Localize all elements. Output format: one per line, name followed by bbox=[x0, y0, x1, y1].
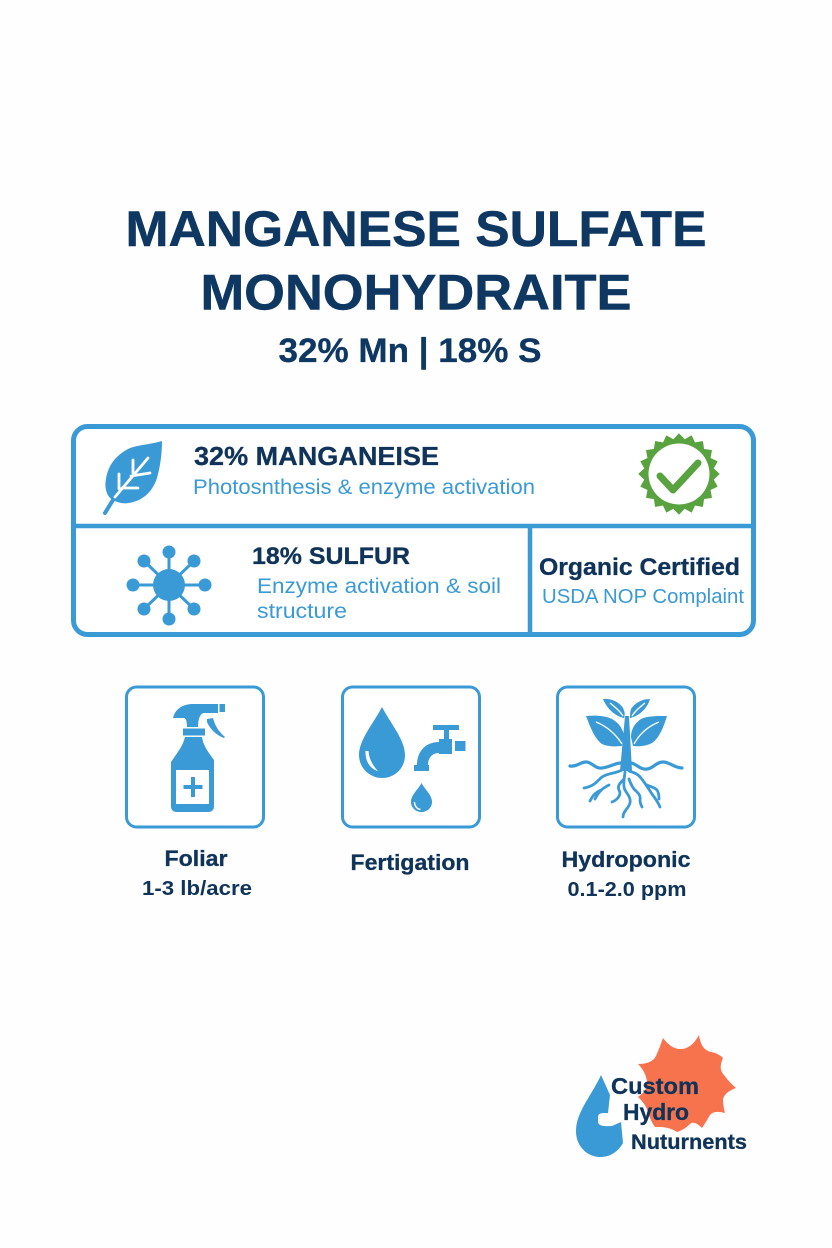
title: MANGANESE SULFATE bbox=[126, 201, 706, 257]
icon: green certified badge bbox=[639, 434, 719, 514]
label: hydroponic: Hydroponic bbox=[562, 847, 690, 872]
text: sulfur: 18% SULFUR bbox=[252, 543, 410, 570]
label: foliar bbox=[142, 846, 252, 900]
label: foliar: Foliar bbox=[164, 846, 228, 871]
label: foliar: 1-3 lb/acre bbox=[142, 878, 252, 900]
label: hydroponic: 0.1-2.0 ppm bbox=[568, 879, 686, 901]
logo: Custom Hydro Nutrients bbox=[576, 1035, 747, 1157]
card: hydroponic bbox=[558, 687, 694, 901]
text: organic certified: USDA NOP Complaint bbox=[542, 586, 744, 608]
text: logo wordmark: Custom bbox=[611, 1073, 699, 1099]
label: hydroponic bbox=[562, 847, 690, 901]
text: sulfur bbox=[252, 543, 501, 623]
title: MONOHYDRAITE bbox=[200, 264, 632, 320]
text: sulfur: Enzyme activation & soil bbox=[257, 575, 501, 598]
icon: spray bottle bbox=[171, 704, 225, 812]
text: logo wordmark: Hydro bbox=[623, 1099, 689, 1125]
icon: plant with roots bbox=[570, 699, 682, 817]
icon: orange sunburst bbox=[638, 1035, 736, 1132]
subtitle: 32% Mn | 18% S bbox=[278, 332, 542, 370]
card: fertigation bbox=[342, 687, 480, 875]
icon: molecule bbox=[126, 546, 212, 626]
card: foliar bbox=[126, 687, 264, 900]
text: logo wordmark: Nuturnents bbox=[631, 1131, 747, 1154]
text: organic certified: Organic Certified bbox=[539, 554, 740, 581]
text: manganese bbox=[193, 441, 535, 499]
label: fertigation: Fertigation bbox=[350, 850, 470, 875]
text: manganese: 32% MANGANEISE bbox=[194, 441, 439, 471]
icon: drop and faucet bbox=[359, 707, 466, 812]
panel: nutrient table bbox=[74, 426, 754, 634]
title bbox=[126, 201, 706, 320]
text: sulfur: structure bbox=[257, 600, 347, 623]
text: logo wordmark bbox=[611, 1073, 747, 1154]
text: manganese: Photosnthesis & enzyme activation bbox=[193, 476, 535, 499]
icon: water drop bbox=[576, 1075, 623, 1157]
icon: leaf bbox=[105, 441, 162, 513]
text: organic certified bbox=[539, 554, 744, 608]
